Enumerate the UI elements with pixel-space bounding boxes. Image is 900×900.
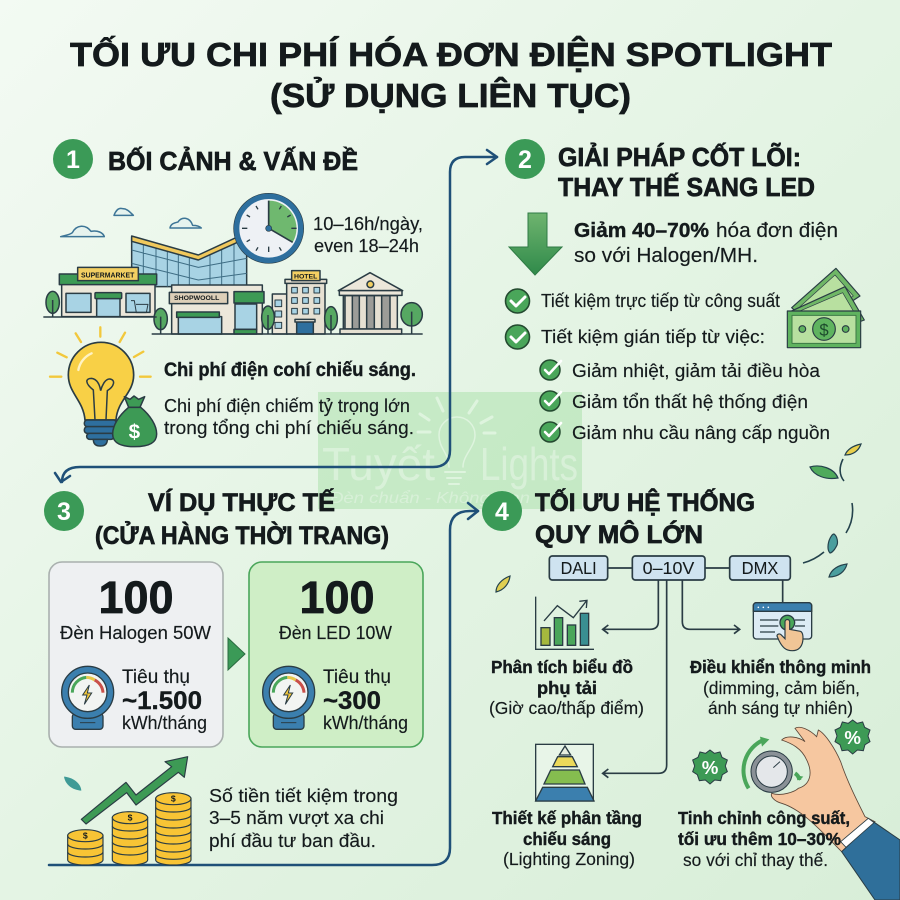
watermark: Đèn chuẩn - Không gian bbox=[330, 489, 530, 507]
section 1 heading: BỐI CẢNH & VẤN ĐỀ bbox=[108, 146, 358, 176]
card: LED: ~300 bbox=[323, 687, 381, 715]
clock text: even 18–24h bbox=[314, 236, 419, 256]
icon: clock bbox=[233, 193, 304, 264]
icon: zoning pyramid bbox=[536, 744, 594, 801]
card: LED bbox=[249, 562, 423, 747]
smart control caption: Điều khiển thông minh bbox=[690, 657, 871, 677]
section 3 badge bbox=[44, 491, 84, 531]
chart caption: (Giờ cao/thấp điểm) bbox=[489, 698, 644, 718]
card: LED: Tiêu thụ bbox=[323, 667, 391, 688]
section 4 heading bbox=[535, 487, 755, 549]
check item: Tiết kiệm trực tiếp từ công suất bbox=[541, 291, 780, 311]
sub item: Giảm nhu cầu nâng cấp nguồn bbox=[572, 423, 830, 443]
percent badges bbox=[693, 720, 870, 784]
tuning caption bbox=[678, 808, 850, 870]
section 1 badge: 1 bbox=[66, 146, 80, 174]
check item bbox=[506, 325, 765, 349]
arrow: section 1 to 2 and down to 3 bbox=[55, 150, 497, 482]
percent badges: % bbox=[702, 757, 719, 778]
glass bbox=[132, 237, 247, 287]
zoning caption bbox=[492, 808, 642, 869]
card: halogen: Tiêu thụ bbox=[122, 667, 190, 688]
card: halogen: Đèn Halogen 50W bbox=[60, 623, 211, 643]
city illustration: SHOPWOOLL bbox=[174, 295, 219, 302]
section 2 heading: THAY THẾ SANG LED bbox=[558, 172, 815, 202]
panel: section 1 context bbox=[43, 139, 423, 447]
smart control caption: ánh sáng tự nhiên) bbox=[708, 698, 853, 718]
section 2 heading: GIẢI PHÁP CỐT LÕI: bbox=[558, 142, 801, 172]
cost description: trong tổng chi phí chiếu sáng. bbox=[164, 418, 414, 438]
card: halogen bbox=[49, 562, 223, 747]
protocol boxes: 0–10V bbox=[643, 558, 695, 578]
icon: growth arrow and coins bbox=[64, 757, 191, 865]
panel: section 4 large-scale optimisation bbox=[482, 444, 900, 900]
icon: banknotes bbox=[787, 268, 864, 348]
card: LED: kWh/tháng bbox=[323, 713, 408, 733]
shop bbox=[172, 285, 262, 334]
icon: down arrow bbox=[509, 213, 562, 275]
protocol boxes: DALI bbox=[561, 558, 597, 578]
chart caption bbox=[489, 657, 644, 718]
cost statement: Chi phí điện cohí chiếu sáng. bbox=[164, 360, 416, 381]
savings text: Số tiền tiết kiệm trong bbox=[209, 786, 398, 806]
icon: smart control screen bbox=[753, 603, 812, 651]
saving headline: hóa đơn điện bbox=[716, 220, 838, 242]
section 3 heading: (CỬA HÀNG THỜI TRANG) bbox=[95, 520, 389, 550]
saving headline bbox=[574, 220, 838, 267]
percent badges: % bbox=[844, 727, 861, 748]
icon: light bulb with money bag: $ bbox=[129, 420, 141, 443]
saving headline: so với Halogen/MH. bbox=[574, 245, 758, 267]
smart control caption: (dimming, cảm biến, bbox=[703, 678, 860, 698]
section 4 heading: TỐI ƯU HỆ THỐNG bbox=[535, 487, 755, 517]
tuning caption: Tinh chỉnh công suất, bbox=[678, 808, 850, 828]
arrow: halogen to LED bbox=[228, 638, 245, 670]
hotel bbox=[272, 294, 287, 334]
section 2 badge: 2 bbox=[518, 146, 532, 174]
tuning caption: so với chỉ thay thế. bbox=[683, 850, 828, 870]
chart caption: Phân tích biểu đồ bbox=[491, 657, 633, 677]
section 2 badge bbox=[505, 139, 545, 179]
section 4 heading: QUY MÔ LỚN bbox=[535, 519, 703, 549]
icon: meter bbox=[62, 666, 114, 729]
icon: growth arrow and coins: $ bbox=[128, 813, 133, 823]
city illustration: SUPERMARKET bbox=[81, 270, 135, 279]
section 3 heading: VÍ DỤ THỰC TẾ bbox=[148, 488, 335, 517]
savings text: phí đầu tư ban đầu. bbox=[209, 831, 376, 851]
zoning caption: Thiết kế phân tầng bbox=[492, 808, 642, 828]
ground bbox=[43, 317, 423, 334]
chart caption: phụ tải bbox=[537, 678, 597, 698]
clock text: 10–16h/ngày, bbox=[313, 214, 423, 234]
clock text bbox=[313, 214, 423, 256]
protocol boxes bbox=[549, 556, 790, 778]
city illustration: HOTEL bbox=[294, 274, 317, 281]
zoning caption: (Lighting Zoning) bbox=[503, 849, 635, 869]
section 1 badge bbox=[53, 139, 93, 179]
title: (SỬ DỤNG LIÊN TỤC) bbox=[270, 77, 631, 114]
title bbox=[70, 35, 832, 114]
icon: growth arrow and coins: $ bbox=[171, 794, 176, 804]
saving headline: Giảm 40–70% bbox=[574, 220, 709, 242]
cost description bbox=[164, 396, 414, 438]
check item: Tiết kiệm gián tiếp từ việc: bbox=[541, 327, 765, 347]
supermarket bbox=[62, 284, 155, 317]
savings text: 3–5 năm vượt xa chi bbox=[209, 808, 384, 828]
icon: meter bbox=[263, 666, 315, 729]
decorative leaves bbox=[496, 444, 861, 592]
protocol boxes: DMX bbox=[742, 558, 779, 578]
section 3 heading bbox=[95, 488, 389, 550]
section 4 badge: 4 bbox=[495, 498, 509, 526]
card: halogen: ~1.500 bbox=[122, 687, 202, 715]
bank bbox=[343, 296, 395, 329]
sub item: Giảm nhiệt, giảm tải điều hòa bbox=[572, 361, 821, 381]
section 4 badge bbox=[482, 491, 522, 531]
panel: section 2 LED solution bbox=[505, 139, 864, 443]
card: halogen: 100 bbox=[98, 572, 174, 623]
tuning caption: tối ưu thêm 10–30% bbox=[678, 829, 841, 849]
city illustration bbox=[43, 208, 423, 334]
section 3 badge: 3 bbox=[57, 498, 71, 526]
checklist bbox=[506, 289, 830, 443]
watermark: Tuyết bbox=[322, 438, 435, 490]
card: halogen: kWh/tháng bbox=[122, 713, 207, 733]
panel: section 3 example bbox=[44, 488, 423, 865]
icon: growth arrow and coins: $ bbox=[83, 831, 88, 841]
smart control caption bbox=[690, 657, 871, 718]
card: LED: 100 bbox=[299, 572, 375, 623]
title: TỐI ƯU CHI PHÍ HÓA ĐƠN ĐIỆN SPOTLIGHT bbox=[70, 35, 832, 73]
watermark bbox=[318, 392, 582, 509]
section 2 heading bbox=[558, 142, 815, 202]
arrow: section 3 to 4 bbox=[49, 503, 478, 865]
zoning caption: chiếu sáng bbox=[523, 829, 611, 849]
watermark: Lights bbox=[480, 438, 578, 490]
icon: hand turning dimmer bbox=[743, 727, 900, 900]
trees bbox=[46, 291, 422, 330]
savings text bbox=[209, 786, 398, 851]
sub item: Giảm tổn thất hệ thống điện bbox=[572, 392, 808, 412]
icon: banknotes: $ bbox=[819, 320, 829, 339]
icon: load chart bbox=[536, 597, 594, 649]
cost description: Chi phí điện chiếm tỷ trọng lớn bbox=[164, 396, 410, 416]
card: LED: Đèn LED 10W bbox=[279, 623, 392, 643]
icon: light bulb with money bag bbox=[50, 327, 157, 447]
